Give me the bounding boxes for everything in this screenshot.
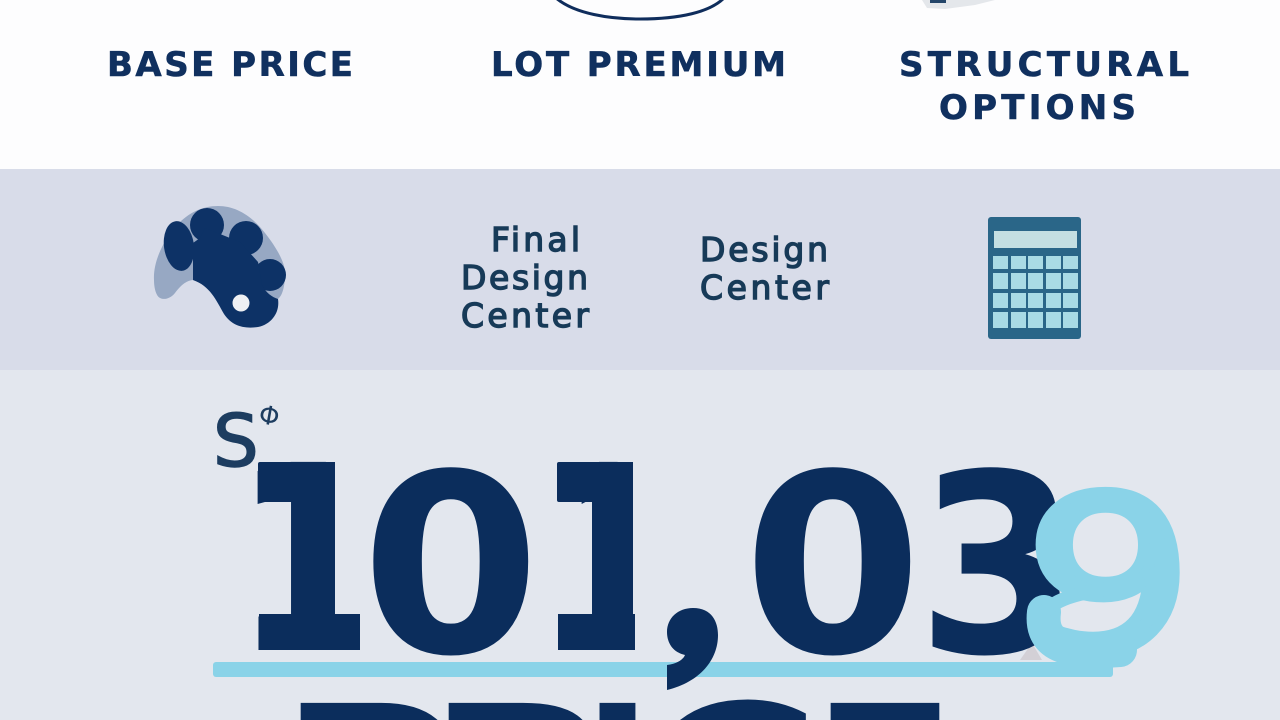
text: final design center — [461, 220, 589, 335]
price word, cropped — [277, 651, 957, 720]
text: design center — [700, 230, 829, 307]
total figure: 0 — [361, 421, 541, 711]
icon: structural options, cropped — [922, 0, 995, 9]
icon: calculator — [988, 217, 1081, 339]
total figure: 1 — [570, 412, 642, 712]
icon: paint palette — [154, 206, 286, 328]
panel: design center band — [0, 169, 1280, 370]
label: structural options — [899, 45, 1189, 128]
total figure: , — [676, 540, 722, 679]
total figure: 3 — [917, 421, 1079, 711]
label: structural options: STRUCTURAL — [899, 45, 1189, 85]
label: base price: BASE PRICE — [107, 45, 353, 85]
panel: total price — [0, 370, 1280, 720]
overlapping digit nine: 9 — [1024, 451, 1193, 702]
label: structural options: OPTIONS — [939, 88, 1136, 128]
text: final design center: Center — [461, 296, 589, 335]
text: final design center: Final — [491, 220, 580, 259]
text: design center: Design — [700, 230, 828, 269]
label: lot premium: LOT PREMIUM — [491, 45, 786, 85]
total figure: 0 — [743, 421, 923, 711]
accent underline — [213, 662, 1113, 677]
icon: lot oval, cropped — [556, 0, 724, 19]
total figure — [236, 411, 1079, 712]
panel: top cost categories — [0, 0, 1280, 169]
text: final design center: Design — [461, 258, 588, 297]
currency mark: S: S — [213, 399, 259, 483]
shadow patches behind nine — [1020, 567, 1058, 660]
total figure: 1 — [236, 411, 372, 712]
currency mark: small symbol: Φ — [256, 400, 282, 433]
text: design center: Center — [700, 268, 829, 307]
